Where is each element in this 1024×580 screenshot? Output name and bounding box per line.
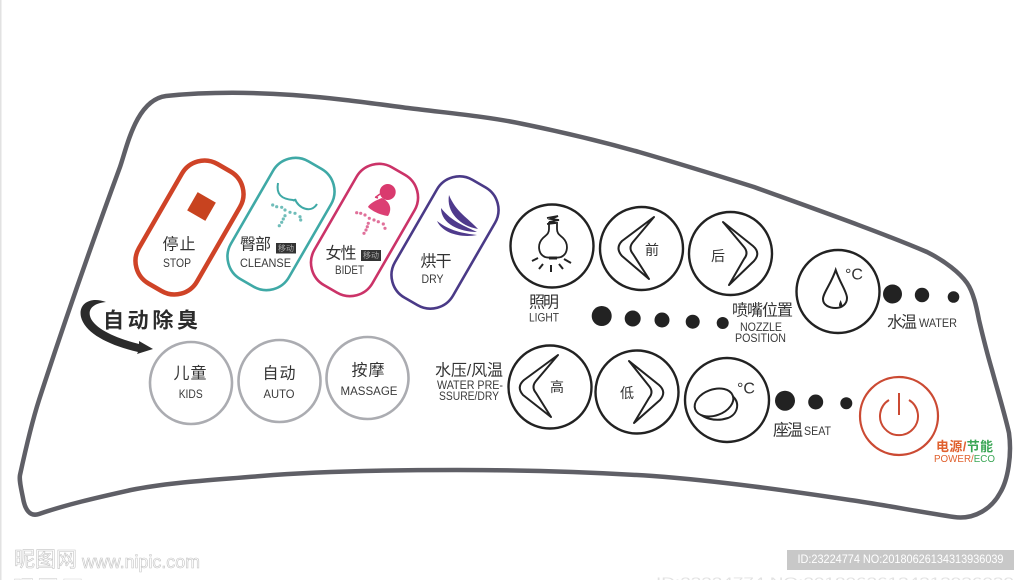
icon: power symbol [880,393,918,435]
watermark: nipic [14,548,200,572]
panel: control panel outline [20,93,1010,517]
button: power [860,377,938,455]
label: nozzle position: POSITION [735,333,786,345]
button: pressure high [508,346,592,428]
seat temperature level dots [775,391,852,411]
arrow: auto deodorize [81,300,153,354]
label: dry: 烘干 [420,252,452,270]
button: auto: 自动 [262,364,296,382]
water temperature level dots [883,284,959,304]
label: light [529,294,559,325]
button: light [510,204,594,288]
label: stop: STOP [163,258,191,270]
button: seat temperature: °C [737,380,755,398]
watermark: faint repeated row at bottom edge [13,577,1014,580]
button: kids: 儿童 [174,364,206,382]
button: kids: KIDS [179,389,203,401]
label: dry: DRY [422,274,444,286]
button: kids [150,342,232,424]
icon: bidet figure [355,184,396,235]
label: power / eco: POWER/ECO [934,453,995,465]
label: cleanse [240,236,296,270]
button: bidet [301,154,428,306]
label: cleanse: 移动 [278,243,294,253]
button: dry [382,167,508,318]
label: water: WATER [919,318,957,330]
label: cleanse: CLEANSE [240,258,291,270]
label: cleanse: 臀部 [240,236,271,254]
label: power / eco: 电源/节能 [936,438,993,454]
button: nozzle forward [600,207,683,290]
button: auto [238,340,320,422]
label: dry [420,252,452,286]
button: nozzle back: 后 [711,248,725,264]
watermark: id bar [787,550,1014,570]
label: nozzle position: NOZZLE [740,322,782,334]
watermark: nipic: 昵图网 [14,548,77,572]
label: water: 水温 [887,314,917,332]
label: stop [162,236,196,270]
label: seat [773,422,831,440]
icon: water drop [823,270,847,308]
button: water temperature [796,250,880,333]
heading: auto deodorize: 自动除臭 [103,308,198,332]
label: seat: SEAT [804,426,831,438]
label: nozzle position: 喷嘴位置 [732,302,793,320]
icon: cleanse spray [271,183,317,227]
label: water [887,314,957,332]
watermark: id bar: ID:23224774 NO:20180626134313936039 [798,554,1004,566]
label: power / eco [934,438,995,465]
label: bidet [326,244,381,277]
button: pressure low: 低 [620,385,634,401]
icon: seat [691,383,737,422]
label: light: 照明 [529,294,559,312]
button: massage: MASSAGE [340,386,398,398]
button: pressure high: 高 [550,379,564,395]
button: nozzle forward: 前 [645,242,659,258]
label: seat: 座温 [773,422,803,440]
button: nozzle back [689,212,772,295]
label: light: LIGHT [529,313,559,325]
button: auto: AUTO [264,389,295,401]
button: massage [326,337,408,419]
icon: dry swooshes [437,195,478,236]
label: bidet: 女性 [326,244,356,262]
button: stop [126,151,253,304]
label: stop: 停止 [162,236,196,254]
watermark: nipic: www.nipic.com [81,552,200,572]
label: bidet: BIDET [335,265,364,277]
button: massage: 按摩 [352,362,384,380]
button: seat temperature [685,358,769,442]
label: water pressure / dry: WATER PRE- [437,380,503,392]
label: bidet: 移动 [363,250,379,260]
icon: light bulb [532,216,571,272]
nozzle position level dots [592,306,729,329]
label: nozzle position [732,302,793,345]
button: pressure low [596,350,678,434]
button: water temperature: °C [845,266,863,284]
label: water pressure / dry [435,362,503,403]
label: water pressure / dry: 水压/风温 [435,362,503,380]
label: water pressure / dry: SSURE/DRY [439,391,499,403]
button: cleanse [218,148,344,300]
icon: stop square [187,192,216,221]
